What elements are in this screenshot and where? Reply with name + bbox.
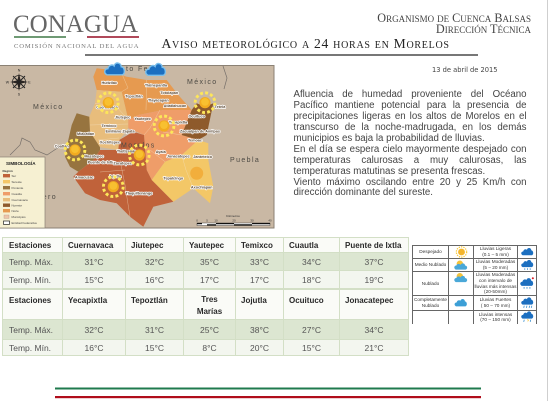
body text — [294, 89, 526, 198]
body text: Pacífico mantiene potencial para la presencia de — [294, 100, 526, 111]
map legend: Simbología: Municipios — [12, 215, 26, 219]
compass rose: E — [28, 80, 31, 84]
max temperature row: 31°C — [84, 256, 104, 266]
max temperature row: 25°C — [200, 324, 219, 334]
municipality labels: Tetela — [215, 105, 226, 109]
body text: Afluencia de humedad proveniente del Océano — [294, 89, 526, 100]
page edge line — [546, 0, 548, 401]
legend row: Despejado: (0.1 – 5 mm) — [482, 252, 509, 257]
min temperature row: 15°C — [302, 342, 321, 352]
map scale bar: 30 — [250, 218, 254, 222]
max temperature row: 32°C — [145, 256, 164, 266]
min temperature row: 17°C — [250, 274, 269, 284]
station names row: Tres — [201, 295, 218, 304]
map place labels: México — [33, 104, 64, 111]
title: Aviso meteorológico a 24 horas en Morelos — [162, 36, 450, 51]
municipality labels: Tlayacapan — [148, 98, 169, 102]
min temperature row: Temp. Mín. — [9, 342, 51, 352]
map scale bar — [196, 214, 272, 226]
footer red line — [55, 396, 481, 398]
station names row: Jiutepec — [131, 240, 163, 250]
max temperature row: 31°C — [145, 324, 164, 334]
max temperature row: Temp. Máx. — [9, 324, 53, 334]
municipality labels: Temoac — [188, 139, 202, 143]
municipality labels: Jantetelco — [193, 155, 213, 159]
region: Norte — [93, 68, 192, 120]
region: Cuernavaca — [89, 90, 128, 150]
legend row: Despejado: Despejado — [419, 249, 442, 254]
municipality labels: Ocuituco — [188, 114, 206, 118]
body text: precipitaciones ligeras en los altos de Morelos en el — [294, 111, 526, 122]
legend row: Medio Nublado: (5 – 20 mm) — [483, 265, 508, 270]
station names row: Estaciones — [9, 240, 51, 250]
municipality labels: Tlalnepantla — [145, 84, 168, 88]
municipality labels: Yecapixtla — [169, 120, 188, 124]
map place labels: ero — [43, 194, 57, 201]
body text: temperaturas calurosas a muy calurosas, las — [294, 155, 526, 166]
max temperature row: 35°C — [200, 256, 219, 266]
municipality labels: Jojutla — [109, 174, 122, 178]
max temperature row: 34°C — [364, 324, 384, 334]
max temperature row: 34°C — [302, 256, 321, 266]
date: 13 de abril de 2015 — [432, 66, 498, 74]
logo subtitle: COMISIÓN NACIONAL DEL AGUA — [14, 42, 139, 50]
max temperature row — [3, 320, 408, 339]
legend row: Medio Nublado — [415, 259, 534, 270]
municipality labels: Axochiapan — [191, 186, 213, 190]
body text: dirección dominante del sureste. — [294, 187, 433, 198]
min temperature row — [3, 340, 408, 355]
min temperature row — [3, 271, 408, 288]
map legend: Simbología: Poniente — [12, 186, 24, 190]
legend row: Completamente Nublado: ( 50 – 70 mm) — [481, 303, 510, 308]
min temperature row: 15°C — [84, 274, 104, 284]
map place labels: Puebla — [230, 157, 260, 164]
map background — [0, 65, 274, 228]
body text: municipios es baja la probabilidad de lluvias. — [294, 133, 485, 144]
body text: Viento máximo oscilando entre 20 y 25 Km/h con — [294, 176, 526, 188]
map legend: Simbología: Entidad Federativa — [12, 221, 37, 225]
legend row: Nublado: lluvias más intensas — [475, 284, 516, 288]
map legend: Simbología: Sur — [12, 174, 16, 178]
municipality labels: Jonacatepec — [167, 154, 190, 158]
map scale bar: 20 — [232, 218, 236, 222]
region: Sur — [73, 132, 173, 227]
map scale bar: 5 — [206, 218, 208, 222]
municipality labels: Atlatlahucan — [164, 104, 187, 108]
station names row — [3, 240, 408, 288]
max temperature row: 33°C — [250, 256, 269, 266]
station names row: Yautepec — [189, 240, 224, 250]
municipal divisions — [90, 74, 193, 217]
min temperature row: 15°C — [145, 342, 164, 352]
legend row: Completamente Nublado: Completamente — [414, 297, 447, 302]
legend row: Despejado — [414, 246, 534, 322]
logo: CONAGUA — [13, 11, 139, 50]
map legend: Simbología: Región — [2, 169, 13, 173]
map place labels: to Fe — [126, 66, 149, 73]
body text: temperaturas matutinas se presenta frescas. — [294, 166, 485, 177]
municipality labels: Mazatepec — [84, 154, 104, 158]
logo red bar — [87, 36, 139, 38]
municipality labels: Emiliano Zapata — [105, 130, 135, 134]
min temperature row: 17°C — [200, 274, 219, 284]
legend row: Lluvias intensas: (70 – 150 mm) — [480, 317, 511, 322]
municipality labels: Coatlán — [55, 144, 69, 148]
municipality labels: Temixco — [101, 124, 117, 128]
legend row: Completamente Nublado: Nublado — [422, 303, 439, 308]
station names row: Puente de Ixtla — [345, 240, 401, 250]
municipality labels: Zacatepec — [113, 162, 132, 166]
legend row: Nublado: Nublado — [422, 281, 439, 286]
legend row: Medio Nublado: Medio Nublado — [415, 262, 446, 267]
max temperature row: Temp. Máx. — [9, 256, 53, 266]
municipality labels: Ayala — [156, 150, 167, 154]
legend row: Nublado: Lluvias Moderadas — [476, 272, 515, 277]
region: Noreste — [182, 88, 225, 140]
map legend: Simbología: SIMBOLOGÍA — [6, 159, 36, 166]
min temperature row: 21°C — [364, 342, 384, 352]
municipality labels: Tlaquiltenango — [126, 192, 153, 196]
weather symbols legend — [412, 245, 537, 324]
municipality labels — [55, 81, 226, 196]
neighbouring state borders — [10, 66, 227, 155]
legend row: Nublado — [422, 272, 534, 294]
min temperature row: 20°C — [250, 342, 269, 352]
max temperature row: 27°C — [302, 324, 321, 334]
weather suns on map — [65, 93, 215, 197]
temperature table 2 — [2, 289, 409, 356]
logo wordmark: CONAGUA — [13, 11, 138, 38]
map place labels: México — [187, 79, 218, 86]
legend row: Medio Nublado: Lluvias Moderadas — [476, 259, 515, 264]
municipality labels: Huitzilac — [101, 81, 117, 85]
body text: transcurso de la noche-madrugada, en los demás — [294, 122, 526, 133]
compass rose: S — [18, 92, 21, 96]
station names row: Ocuituco — [289, 296, 324, 305]
min temperature row: 16°C — [145, 274, 164, 284]
station names row — [3, 295, 408, 355]
station names row: Temixco — [241, 240, 273, 250]
map legend: Simbología — [0, 157, 45, 228]
map legend: Simbología: Sureste — [12, 180, 22, 184]
min temperature row: 19°C — [364, 274, 384, 284]
municipality labels: Tlaltizapán — [117, 149, 137, 153]
map legend: Simbología: Norte — [12, 209, 19, 213]
max temperature row: 32°C — [84, 324, 104, 334]
municipality labels: Xochitepec — [100, 140, 120, 144]
legend row: Lluvias intensas — [479, 311, 534, 322]
min temperature row: 16°C — [84, 342, 104, 352]
station names row: Cuautla — [289, 240, 318, 250]
map place labels — [33, 66, 260, 201]
min temperature row: 18°C — [302, 274, 321, 284]
map scale bar: 10 — [214, 218, 218, 222]
compass rose: N — [18, 68, 21, 72]
organism heading: Dirección Técnica — [436, 22, 531, 36]
region: Cuautla — [128, 110, 198, 180]
municipality labels: Puente de Ixtla — [88, 160, 115, 164]
organism heading: Organismo de Cuenca Balsas — [377, 10, 531, 24]
temperature table 1 — [2, 237, 409, 289]
title rule — [85, 54, 478, 56]
station names row: Marías — [197, 307, 222, 316]
legend row: Completamente Nublado: Lluvias Fuertes — [480, 297, 511, 302]
map place labels: Morelos — [121, 142, 156, 150]
station names row: Jonacatepec — [345, 296, 393, 305]
municipality labels: Amacuzac — [75, 175, 94, 179]
map scale bar: 0 — [196, 218, 198, 222]
organism heading — [377, 10, 531, 36]
map legend: Simbología: Noreste — [12, 204, 22, 208]
region: Poniente — [65, 113, 100, 172]
station names row: Tepoztlán — [131, 296, 168, 305]
region: Sureste — [152, 140, 213, 203]
map legend: Simbología: Cuernavaca — [12, 198, 28, 202]
legend row: Nublado: (20-50mm) — [484, 289, 507, 294]
legend row: Completamente Nublado — [414, 297, 534, 308]
map frame lines — [0, 66, 274, 228]
municipality labels: Miacatlán — [77, 132, 95, 136]
map legend: Simbología: Cuautla — [12, 192, 22, 196]
compass rose — [6, 68, 31, 96]
max temperature row — [3, 253, 408, 270]
municipality labels: Totolapan — [160, 91, 179, 95]
min temperature row: 8°C — [202, 342, 217, 352]
map scale bar: 40 — [268, 218, 272, 222]
station names row: Cuernavaca — [68, 240, 113, 250]
max temperature row: 38°C — [250, 324, 269, 334]
municipality labels: Tepoztlán — [125, 94, 143, 98]
municipality labels: Yautepec — [134, 117, 151, 121]
legend row: Despejado: Lluvias Ligeras — [480, 246, 511, 251]
legend row: Nublado: con intervalo de — [479, 278, 512, 283]
municipality labels: Zacualpan de Amilpas — [180, 129, 220, 133]
max temperature row: 37°C — [364, 256, 384, 266]
municipality labels: Cuernavaca — [96, 105, 119, 109]
footer green line — [55, 388, 481, 390]
station names row: Estaciones — [9, 296, 51, 305]
compass rose: W — [6, 80, 10, 84]
body text: En el día se espera cielo mayormente despejado con — [294, 144, 526, 155]
municipality labels: Jiutepec — [115, 116, 130, 120]
map scale bar: Kilómetros — [226, 214, 240, 218]
station names row: Yecapixtla — [68, 296, 107, 305]
station names row: Jojutla — [241, 296, 267, 305]
legend row: Lluvias intensas: Lluvias intensas — [479, 312, 512, 317]
logo green bar — [14, 36, 66, 38]
rain clouds on map — [105, 63, 165, 75]
min temperature row: Temp. Mín. — [9, 274, 51, 284]
municipality labels: Tepalcingo — [163, 177, 184, 181]
